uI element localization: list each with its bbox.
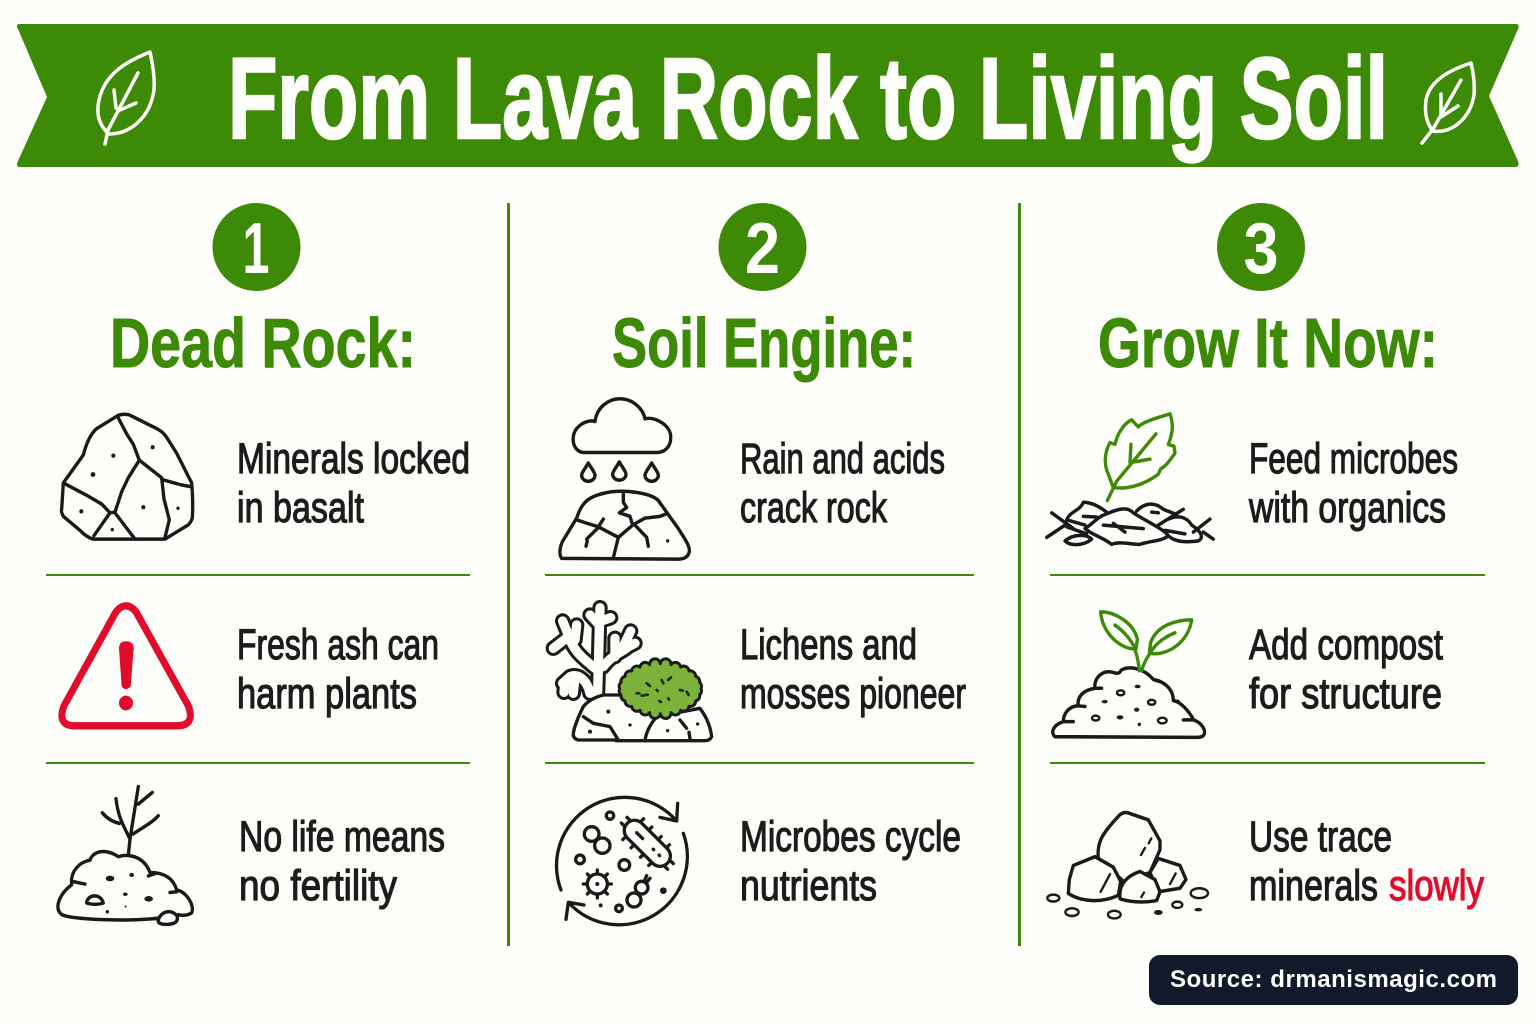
source badge: Source: drmanismagic.com [1170,966,1497,993]
text: rain and acids [740,435,945,532]
icon: leaf over organic mulch [1047,414,1213,545]
panel: soil engine [545,203,974,925]
divider [46,574,470,576]
text: use trace minerals [1249,813,1484,910]
icon: warning triangle [62,606,190,726]
icon: microbes in nutrient cycle [557,797,687,925]
text: no life [239,813,445,910]
divider [1050,762,1485,764]
text: use trace minerals: minerals [1249,862,1378,910]
text: feed microbes [1248,435,1458,532]
icon: right leaf [1422,63,1474,143]
panel: grow it now [1047,203,1485,918]
number badge 3 [1217,203,1305,291]
text: lichens and mosses: mosses pioneer [740,670,966,718]
number badge 1: 1 [242,209,270,289]
text: microbes cycle: Microbes cycle [740,813,961,861]
number badge 2 [718,203,806,291]
heading: dead rock: Dead Rock: [110,304,416,382]
divider [1050,574,1485,576]
text: no life: No life means [239,813,445,861]
number badge 2: 2 [745,209,780,289]
text: rain and acids: Rain and acids [740,435,945,483]
icon: cracked rock [61,414,193,539]
column divider 2 [1018,203,1021,946]
text: microbes cycle: nutrients [740,862,877,910]
text: feed microbes: with organics [1248,484,1446,532]
text: minerals locked [237,435,470,532]
icon: left leaf [98,52,154,144]
source badge [1149,955,1518,1005]
text: microbes cycle [740,813,961,910]
column divider 1 [507,203,510,946]
heading: soil engine: Soil Engine: [612,304,916,382]
text: feed microbes: Feed microbes [1249,435,1458,483]
text: lichens and mosses: Lichens and [740,621,917,669]
divider [545,574,974,576]
text: add compost [1249,621,1443,718]
number badge 3: 3 [1244,209,1278,289]
divider [46,762,470,764]
divider [545,762,974,764]
icon: lichen and moss on rock [553,608,712,741]
text: fresh ash: harm plants [237,670,417,718]
icon: seedling in compost pile [1053,612,1205,737]
icon: rain cloud over cracking rock [560,399,689,559]
text: lichens and mosses [740,621,966,718]
text: minerals locked: in basalt [237,484,364,532]
text: fresh ash: Fresh ash can [237,621,439,669]
text: add compost: for structure [1249,670,1442,718]
text: use trace minerals: Use trace [1249,813,1392,861]
number badge 1 [212,203,300,291]
text: minerals locked: Minerals locked [237,435,470,483]
panel: dead rock [46,203,470,924]
icon: pile of mineral rocks [1047,813,1208,918]
heading: grow it now: Grow It Now: [1098,304,1438,382]
text: rain and acids: crack rock [740,484,887,532]
text: fresh ash [237,621,439,718]
icon: barren soil with dead twig [58,787,192,924]
text: use trace minerals: slowly [1389,862,1484,910]
text: add compost: Add compost [1249,621,1443,669]
title banner [17,24,1519,167]
text: no life: no fertility [239,862,397,910]
